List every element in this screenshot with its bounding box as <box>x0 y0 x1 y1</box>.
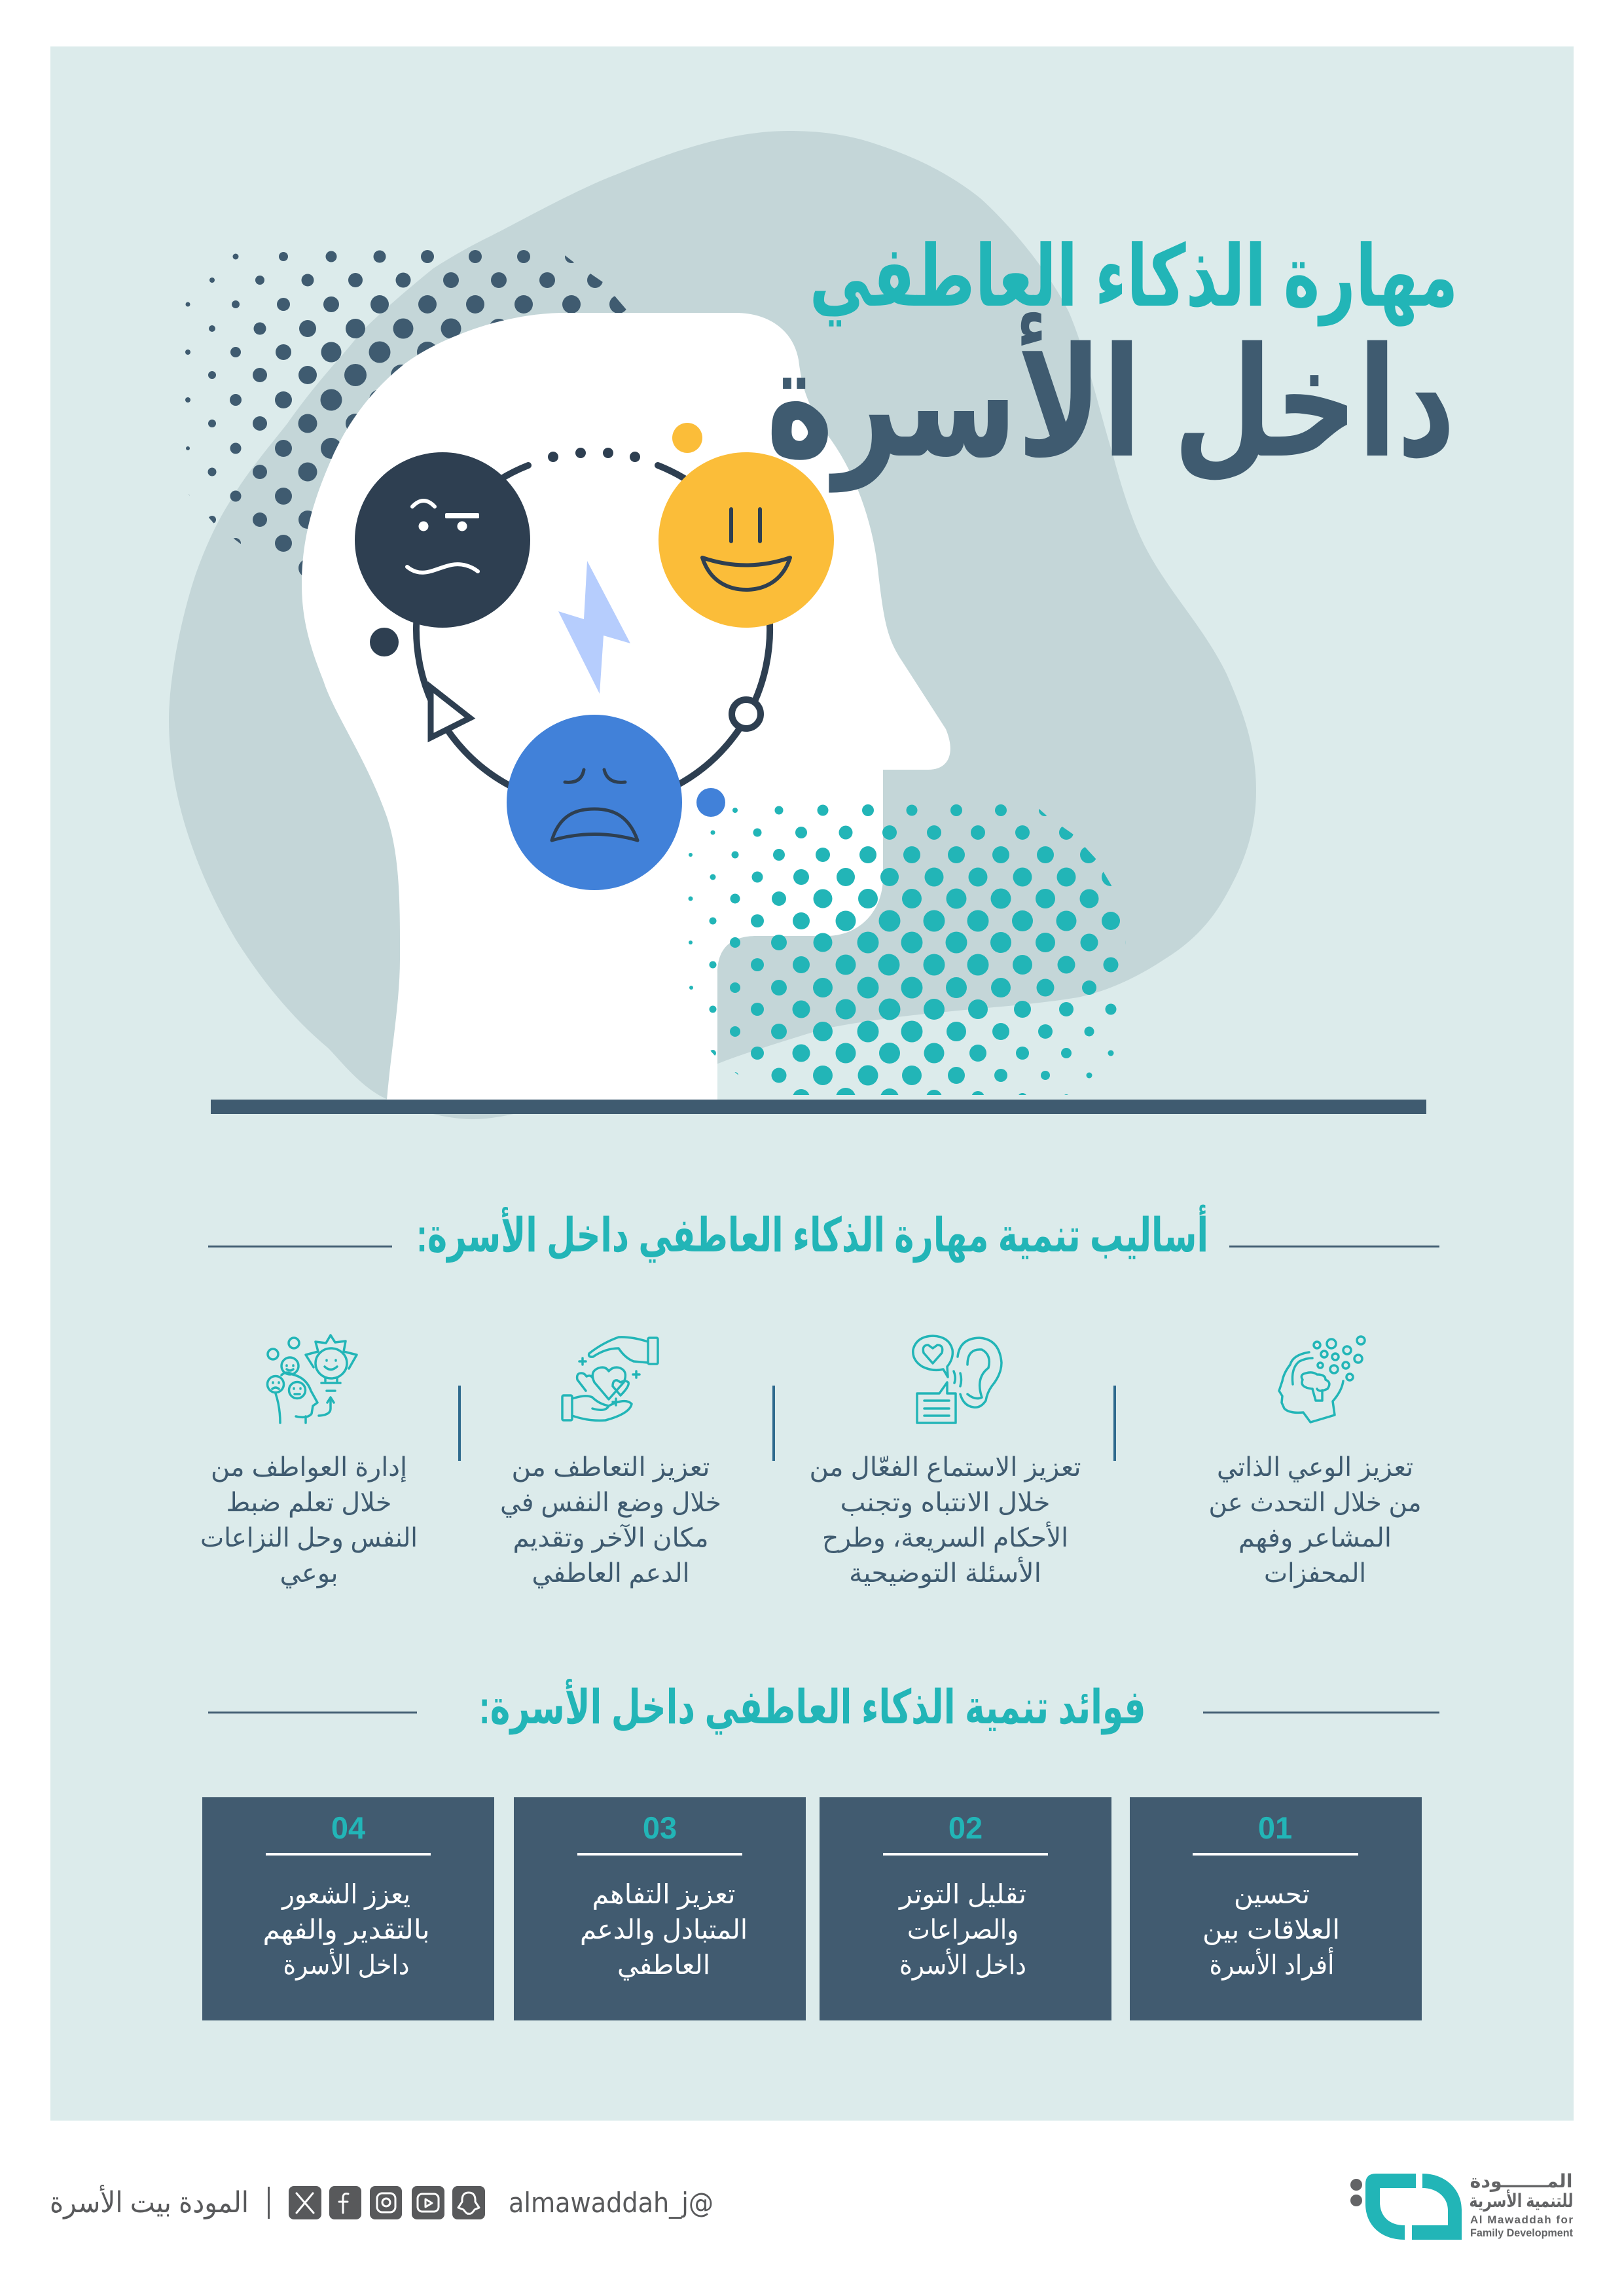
halftone: teal dots <box>689 804 1141 1107</box>
icon: facebook <box>329 2186 361 2219</box>
face: angry <box>355 452 530 628</box>
method 1: self awareness: المشاعر وفهم <box>1238 1524 1392 1553</box>
method 4: manage emotions: خلال تعلم ضبط <box>226 1488 391 1518</box>
card 01: تحسين <box>1234 1879 1310 1910</box>
icon: ear and speech bubbles <box>913 1336 1001 1423</box>
card 02: 02 <box>948 1810 983 1845</box>
card 04: داخل الأسرة <box>283 1948 410 1981</box>
icon: instagram <box>370 2186 402 2219</box>
heading: benefits: فوائد تنمية الذكاء العاطفي داخل الأسرة: <box>479 1678 1146 1735</box>
icon: head with brain <box>1279 1336 1365 1422</box>
icon: x <box>289 2186 321 2219</box>
icon: hands and hearts <box>562 1337 658 1420</box>
logo text: Family Development <box>1470 2227 1573 2239</box>
face: happy <box>659 452 834 628</box>
heading: methods: أساليب تنمية مهارة الذكاء العاطفي داخل الأسرة: <box>416 1204 1208 1263</box>
method 4: manage emotions: إدارة العواطف من <box>211 1453 407 1482</box>
method 3: empathy: تعزيز التعاطف من <box>512 1453 710 1482</box>
icon: lightbulb and head <box>267 1335 357 1423</box>
method 1: self awareness: المحفزات <box>1264 1559 1366 1588</box>
method 2: active listening: خلال الانتباه وتجنب <box>840 1488 1050 1518</box>
card 04: بالتقدير والفهم <box>263 1914 429 1945</box>
card 01: العلاقات بين <box>1202 1914 1340 1945</box>
method 1: self awareness: تعزيز الوعي الذاتي <box>1217 1453 1413 1482</box>
method 1: self awareness <box>1208 1336 1422 1588</box>
card 02: والصراعات <box>907 1914 1019 1945</box>
card 02: داخل الأسرة <box>899 1948 1026 1981</box>
card 04: 04 <box>331 1810 365 1845</box>
card 02: تقليل التوتر <box>898 1879 1026 1910</box>
card 01: أفراد الأسرة <box>1210 1947 1334 1981</box>
blob: background shape <box>169 131 1256 1119</box>
heading: methods <box>208 1204 1439 1263</box>
card 04: يعزز الشعور <box>281 1879 410 1910</box>
logo <box>1350 2171 1574 2240</box>
card 03 <box>514 1797 806 2020</box>
method 2: active listening: تعزيز الاستماع الفعّال من <box>809 1453 1081 1482</box>
card 03: المتبادل والدعم <box>580 1914 748 1945</box>
method 3: empathy: خلال وضع النفس في <box>500 1488 721 1518</box>
card 03: تعزيز التفاهم <box>592 1879 736 1910</box>
card 04 <box>202 1797 494 2020</box>
card 02 <box>820 1797 1111 2020</box>
method 3: empathy: الدعم العاطفي <box>532 1559 690 1588</box>
method 4: manage emotions <box>200 1335 418 1588</box>
icon: snapchat <box>452 2186 485 2219</box>
dot: yellow <box>672 423 702 453</box>
footer: separator <box>268 2187 270 2219</box>
method 2: active listening: الأسئلة التوضيحية <box>849 1556 1041 1588</box>
halftone: navy dots <box>185 250 628 577</box>
footer: tagline: المودة بيت الأسرة <box>50 2184 249 2219</box>
method 3: empathy <box>500 1337 721 1588</box>
logo text <box>1469 2171 1574 2239</box>
icon: youtube <box>412 2186 444 2219</box>
logo mark <box>1350 2174 1462 2240</box>
card 03: 03 <box>643 1810 677 1845</box>
card 03: العاطفي <box>617 1950 710 1981</box>
method 3: empathy: مكان الآخر وتقديم <box>513 1524 708 1553</box>
logo text: للتنمية الأسرية <box>1469 2189 1574 2212</box>
method 2: active listening: الأحكام السريعة، وطرح <box>822 1521 1068 1553</box>
column dividers <box>458 1386 1116 1461</box>
icon: lightning bolt <box>558 561 630 694</box>
method 4: manage emotions: النفس وحل النزاعات <box>200 1524 418 1553</box>
base bar <box>211 1100 1426 1114</box>
method 2: active listening <box>809 1336 1081 1588</box>
dot: blue <box>696 788 725 817</box>
method 1: self awareness: من خلال التحدث عن <box>1208 1488 1422 1518</box>
emotion ring <box>370 448 770 806</box>
face: sad <box>507 715 682 890</box>
head silhouette <box>302 313 950 1100</box>
card 01 <box>1130 1797 1422 2020</box>
logo text: Al Mawaddah for <box>1470 2214 1573 2226</box>
heading: benefits <box>208 1678 1439 1735</box>
logo text: المـــــــودة <box>1470 2171 1572 2192</box>
method 4: manage emotions: بوعي <box>280 1559 338 1588</box>
card 01: 01 <box>1258 1810 1292 1845</box>
footer: handle: almawaddah_j@ <box>509 2187 713 2219</box>
footer: social icons <box>289 2186 485 2219</box>
